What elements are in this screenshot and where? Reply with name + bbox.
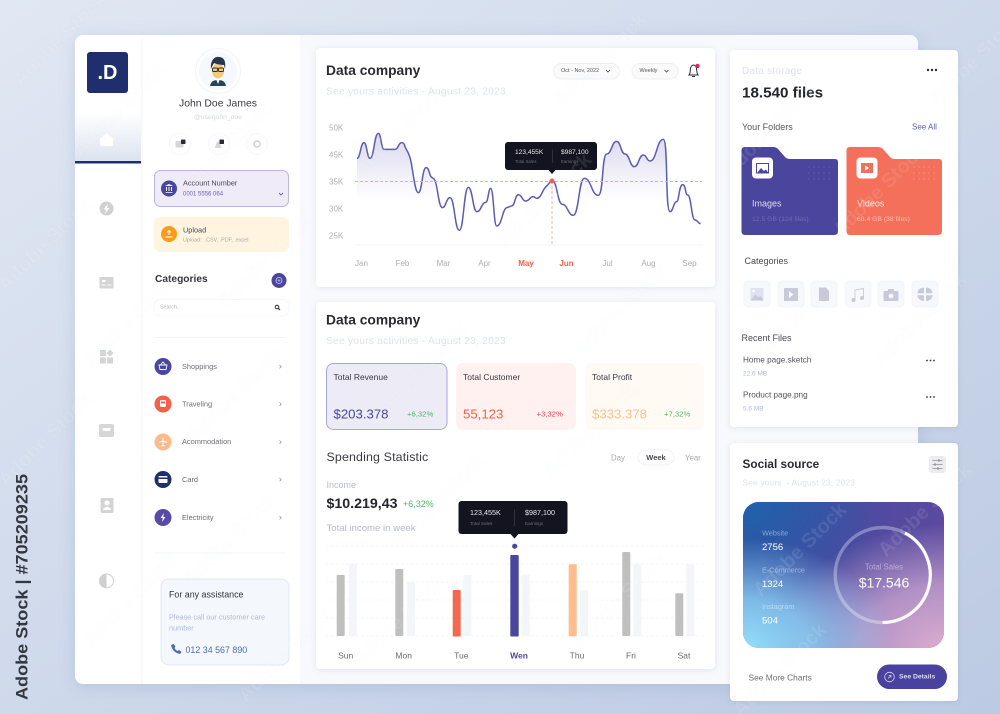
active nav item: home <box>75 112 141 164</box>
panel: main dashboard shell <box>75 35 918 684</box>
logo <box>87 52 128 93</box>
income label: Income <box>326 480 356 490</box>
ring chart: Total Sales <box>865 562 903 572</box>
category row: Card <box>154 471 281 488</box>
assistance card: Please call our customer care <box>169 612 265 622</box>
date range filter <box>554 64 620 79</box>
watermark: repeated diagonal marks: Adobe Stock <box>174 98 277 201</box>
x axis labels: Feb <box>396 259 410 268</box>
social subtitle: See yours - August 23, 2023 <box>742 478 855 488</box>
section subtitle: See yours activities - August 23, 2023 <box>326 336 506 347</box>
assistance card: For any assistance <box>169 590 244 600</box>
category row: Traveling <box>154 396 281 412</box>
more menu <box>927 69 937 71</box>
recent file: home page <box>743 356 935 378</box>
search box: Search.. <box>160 304 180 310</box>
upload card: Upload: .CSV, .PDF, .excel <box>183 238 248 244</box>
watermark: repeated diagonal marks: Adobe Stock <box>389 448 492 551</box>
icon: bolt <box>100 202 114 216</box>
avatar <box>196 48 240 94</box>
folder: videos: Videos <box>857 198 885 208</box>
ring chart: $17.546 <box>859 574 910 590</box>
bar chart <box>326 544 705 636</box>
panel: profile column <box>154 48 289 665</box>
x axis labels <box>355 259 697 268</box>
chart tooltip: Earnings <box>561 159 579 164</box>
see all link: See All <box>912 122 937 132</box>
social title: Social source <box>742 457 820 471</box>
highlight crosshair <box>355 178 702 245</box>
profile handle: @userjohn_doe <box>194 114 242 121</box>
watermark: repeated diagonal marks: Adobe Stock <box>724 288 827 391</box>
bar chart day labels: Mon <box>395 650 412 660</box>
assistance card <box>161 579 289 665</box>
stat card: total revenue: Total Revenue <box>334 372 388 382</box>
icon: grid <box>100 349 114 364</box>
recent files heading: Recent Files <box>742 333 792 343</box>
y axis labels: 30K <box>329 204 344 214</box>
watermark: repeated diagonal marks: Adobe Stock <box>79 548 182 651</box>
panel: data company summary and spending <box>316 302 715 669</box>
bar chart tooltip: Total Sales <box>470 521 493 526</box>
source: website: 2756 <box>762 542 783 553</box>
recent file: home page: Home page.sketch <box>743 356 812 364</box>
category row: Acommodation <box>154 434 281 450</box>
source: instagram: Instagram <box>762 602 794 611</box>
bar chart day labels: Sun <box>338 650 354 660</box>
categories heading: Categories <box>155 274 208 285</box>
bar chart day labels <box>338 650 691 660</box>
date range filter: Oct - Nov, 2022 <box>561 68 599 74</box>
stat card: total revenue: +6,32% <box>407 410 433 418</box>
watermark: repeated diagonal marks: Adobe Stock <box>539 378 642 481</box>
stat card: total revenue <box>326 364 447 430</box>
account number card: Account Number <box>183 178 238 188</box>
panel: data company line chart <box>316 48 715 287</box>
folder: videos: 68.4 GB (38 files) <box>857 216 910 223</box>
watermark: repeated diagonal marks: Adobe Stock <box>494 148 597 251</box>
recent file: product page: Product page.png <box>743 390 808 400</box>
y axis labels: 25K <box>329 232 344 240</box>
watermark: repeated diagonal marks: Adobe Stock <box>214 208 317 311</box>
period tabs <box>611 450 701 465</box>
x axis labels: Sep <box>682 259 697 268</box>
stat card: total profit <box>585 363 704 430</box>
x axis labels: Aug <box>641 259 656 268</box>
assistance card: 012 34 567 890 <box>186 645 247 655</box>
chart tooltip: $987,100 <box>561 149 589 156</box>
search box <box>154 300 289 316</box>
icon: notification bell <box>689 64 700 76</box>
recent file: home page: 22.6 MB <box>743 370 767 378</box>
stat card: total customer: +3,32% <box>536 410 563 418</box>
see details button: See Details <box>899 674 935 680</box>
watermark: repeated diagonal marks: Adobe Stock <box>369 318 472 421</box>
source: instagram <box>762 602 794 626</box>
stat card: total revenue: $203.378 <box>334 406 389 422</box>
watermark: repeated diagonal marks: Adobe Stock <box>349 78 452 181</box>
watermark: repeated diagonal marks: Adobe Stock <box>569 258 672 361</box>
category row: Traveling: Traveling <box>182 400 212 408</box>
source: e-commerce <box>762 566 805 590</box>
period tabs: Year <box>685 454 701 462</box>
y axis labels <box>329 124 344 240</box>
see more charts link: See More Charts <box>748 672 812 682</box>
bar chart day labels: Thu <box>570 650 585 660</box>
panel: data storage <box>730 50 958 427</box>
stat card: total profit: $333.378 <box>592 406 647 422</box>
profile name: John Doe James <box>179 98 257 110</box>
folder: images: Images <box>752 198 782 208</box>
account number card: 0001 5556 064 <box>183 192 224 198</box>
watermark: repeated diagonal marks: Adobe Stock <box>719 78 822 181</box>
chart title: Data company <box>326 63 421 78</box>
bar chart tooltip: 123,455K <box>470 508 501 517</box>
icon: contrast <box>100 574 114 588</box>
logo: .D <box>98 62 118 84</box>
add category button <box>272 273 286 288</box>
stat card: total profit: +7,32% <box>664 410 690 418</box>
x axis labels: Jul <box>602 259 613 268</box>
ring chart <box>835 528 930 623</box>
income change: +6,32% <box>403 499 434 509</box>
panel: icon navigation rail <box>75 52 141 588</box>
storage label: Data storage <box>742 66 802 77</box>
y axis labels: 45K <box>329 150 344 160</box>
watermark: repeated diagonal marks: Adobe Stock <box>179 488 282 591</box>
watermark: repeated diagonal marks: Adobe Stock <box>829 138 932 241</box>
total income label: Total income in week <box>326 523 416 534</box>
stat card: total customer: Total Customer <box>463 372 520 382</box>
watermark: repeated diagonal marks: Adobe Stock <box>349 568 452 671</box>
gradient stats card <box>743 502 944 648</box>
file count: 18.540 files <box>742 84 823 102</box>
watermark: repeated diagonal marks: Adobe Stock <box>79 268 182 371</box>
watermark: repeated diagonal marks: Adobe Stock <box>549 8 652 111</box>
icon: inbox box <box>99 424 114 437</box>
your folders heading: Your Folders <box>742 122 793 132</box>
category row: Acommodation: Acommodation <box>182 437 231 446</box>
watermark: repeated diagonal marks: Adobe Stock <box>749 498 852 601</box>
stat card: total profit: Total Profit <box>592 372 633 382</box>
panel: social source <box>730 443 958 701</box>
bar chart tooltip: $987,100 <box>525 508 555 517</box>
bar chart tooltip: Earnings <box>525 521 544 526</box>
assistance card: number <box>169 624 194 632</box>
source: website <box>762 528 788 553</box>
period tabs: Day <box>611 454 625 462</box>
category row: Shoppings: Shoppings <box>182 362 217 371</box>
icon: contacts <box>100 498 114 513</box>
stat card: total customer <box>456 363 576 430</box>
chart tooltip: 123,455K <box>515 149 544 156</box>
bar chart day labels: Wen <box>510 650 528 660</box>
source: instagram: 504 <box>762 616 778 626</box>
source: e-commerce: E-Commerce <box>762 566 805 574</box>
watermark: repeated diagonal marks: Adobe Stock <box>234 603 337 706</box>
recent file: product page: 5.6 MB <box>743 406 764 412</box>
category row: Card: Card <box>182 475 198 484</box>
recent file: product page <box>743 390 935 412</box>
section title: Data company <box>326 312 421 328</box>
watermark: repeated diagonal marks: Adobe Stock <box>69 58 172 161</box>
watermark: repeated diagonal marks: Adobe Stock <box>569 548 672 651</box>
x axis labels: Jun <box>559 259 574 268</box>
income value: $10.219,43 <box>326 496 398 512</box>
bar chart day labels: Sat <box>678 650 691 660</box>
y axis labels: 50K <box>329 124 344 132</box>
stat card: total customer: 55,123 <box>463 406 503 422</box>
chart tooltip: Total Sales <box>515 159 537 164</box>
watermark: repeated diagonal marks: Adobe Stock <box>874 458 977 561</box>
category row: Electricity <box>154 509 281 526</box>
folder: images: 12.5 GB (124 files) <box>752 216 809 223</box>
x axis labels: Mar <box>437 259 451 268</box>
filter icon <box>929 456 946 473</box>
source: website: Website <box>762 528 788 538</box>
icon: id card <box>100 277 114 288</box>
weekly filter: Weekly <box>640 68 658 74</box>
account number card <box>154 170 288 206</box>
line chart series <box>357 132 701 232</box>
upload card: Upload <box>183 226 206 234</box>
bar chart day labels: Fri <box>626 650 636 660</box>
bar chart tooltip <box>458 501 568 538</box>
x axis labels: May <box>518 259 534 268</box>
category row: Electricity: Electricity <box>182 513 214 522</box>
y axis labels: 35K <box>329 178 344 186</box>
categories heading: Categories <box>744 256 789 266</box>
x axis labels: Jan <box>355 259 368 268</box>
bar chart day labels: Tue <box>454 650 469 660</box>
spending statistic heading: Spending Statistic <box>326 450 428 464</box>
category tiles <box>744 281 938 307</box>
folder: images <box>742 147 838 235</box>
chart subtitle: See yours activities - August 23, 2023 <box>326 86 506 98</box>
profile quick icons <box>170 134 268 154</box>
watermark: repeated diagonal marks: Adobe Stock <box>869 268 972 371</box>
weekly filter <box>632 64 678 79</box>
folder: videos <box>846 147 942 235</box>
category row: Shoppings <box>154 358 281 375</box>
watermark: stock id: Adobe Stock | #705209235 <box>12 474 32 700</box>
x axis labels: Apr <box>478 259 491 268</box>
source: e-commerce: 1324 <box>762 579 783 590</box>
see details button <box>877 664 947 689</box>
watermark: repeated diagonal marks: Adobe Stock <box>184 343 287 446</box>
upload card <box>154 217 289 252</box>
chart tooltip <box>505 142 597 174</box>
period tabs: Week <box>646 453 667 462</box>
